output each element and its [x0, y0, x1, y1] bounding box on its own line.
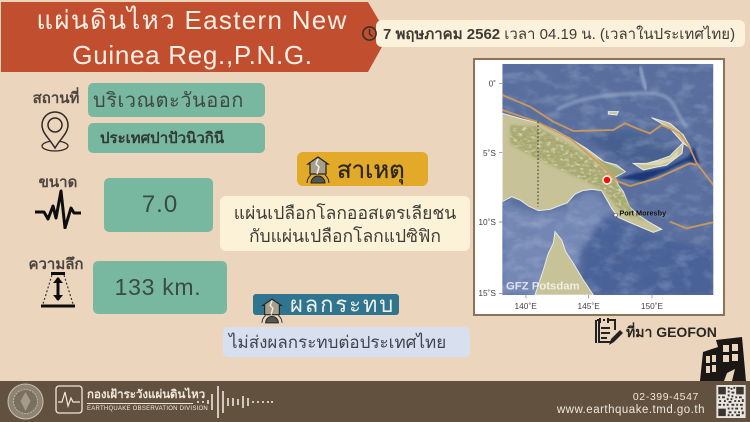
title banner	[1, 2, 382, 72]
icon: clock	[362, 26, 377, 41]
map axis labels: 5˚S	[483, 148, 496, 158]
date and time pill	[376, 20, 745, 47]
depth value box: 133 km.	[115, 274, 201, 300]
border line	[538, 122, 539, 207]
epicentre marker	[603, 176, 611, 184]
map axis labels: 0˚	[489, 79, 496, 89]
icon: location pin	[41, 111, 69, 152]
date and time pill: เวลา 04.19 น. (เวลาในประเทศไทย)	[504, 26, 735, 42]
tectonic plate boundaries	[502, 95, 713, 228]
sound wave decoration	[197, 386, 273, 418]
Port Moresby marker	[614, 213, 617, 217]
cause text: กับแผ่นเปลือกโลกแปซิฟิก	[249, 226, 441, 246]
map plot: Port Moresby	[619, 208, 667, 217]
map axis labels	[478, 79, 664, 311]
division name: กองเฝ้าระวังแผ่นดินไหว	[87, 389, 205, 401]
icon: division logo	[55, 385, 83, 414]
map plot: GFZ Potsdam	[506, 280, 580, 292]
QR code	[716, 385, 746, 418]
location country box	[88, 123, 265, 153]
icon: depth	[41, 272, 75, 308]
location region box	[88, 83, 265, 117]
phone number: 02-399-4547	[633, 391, 699, 403]
footer bar	[0, 381, 750, 422]
cause text	[220, 196, 470, 251]
map axis labels: 145˚E	[578, 301, 600, 311]
website: www.earthquake.tmd.go.th	[557, 404, 705, 416]
division name	[87, 388, 208, 412]
source label: ที่มา GEOFON	[626, 324, 717, 340]
map panel	[473, 58, 725, 316]
date and time pill: 7 พฤษภาคม 2562	[383, 26, 500, 42]
icon: seismic wave	[35, 190, 81, 229]
cause heading	[297, 152, 428, 186]
location label: สถานที่	[33, 90, 79, 107]
map axis labels: 15˚S	[478, 288, 496, 298]
impact heading: ผลกระทบ	[290, 292, 395, 317]
map axis labels: 140˚E	[515, 301, 537, 311]
title banner: แผ่นดินไหว Eastern New	[36, 4, 348, 34]
magnitude value box: 7.0	[142, 191, 178, 218]
icon: damaged house	[261, 298, 283, 324]
cause heading: สาเหตุ	[337, 156, 405, 184]
magnitude value box	[104, 178, 213, 232]
magnitude label: ขนาด	[39, 174, 77, 191]
impact heading	[253, 294, 399, 315]
icon: collapsed buildings	[700, 337, 746, 381]
title banner: Guinea Reg.,P.N.G.	[72, 40, 313, 70]
depth label: ความลึก	[28, 256, 84, 273]
department seal	[8, 384, 44, 420]
depth value box	[93, 261, 227, 314]
map axis labels: 10˚S	[478, 217, 496, 227]
icon: damaged house	[306, 156, 330, 184]
division name: EARTHQUAKE OBSERVATION DIVISION	[87, 406, 208, 412]
map plot	[502, 64, 713, 295]
cause text: แผ่นเปลือกโลกออสเตรเลียชน	[234, 202, 456, 222]
location region box: บริเวณตะวันออก	[93, 90, 244, 112]
map axis labels: 150˚E	[641, 301, 664, 311]
icon: notepad	[595, 318, 623, 345]
impact text	[223, 327, 470, 357]
location country box: ประเทศปาปัวนิวกินี	[100, 130, 224, 147]
impact text: ไม่ส่งผลกระทบต่อประเทศไทย	[229, 332, 446, 352]
